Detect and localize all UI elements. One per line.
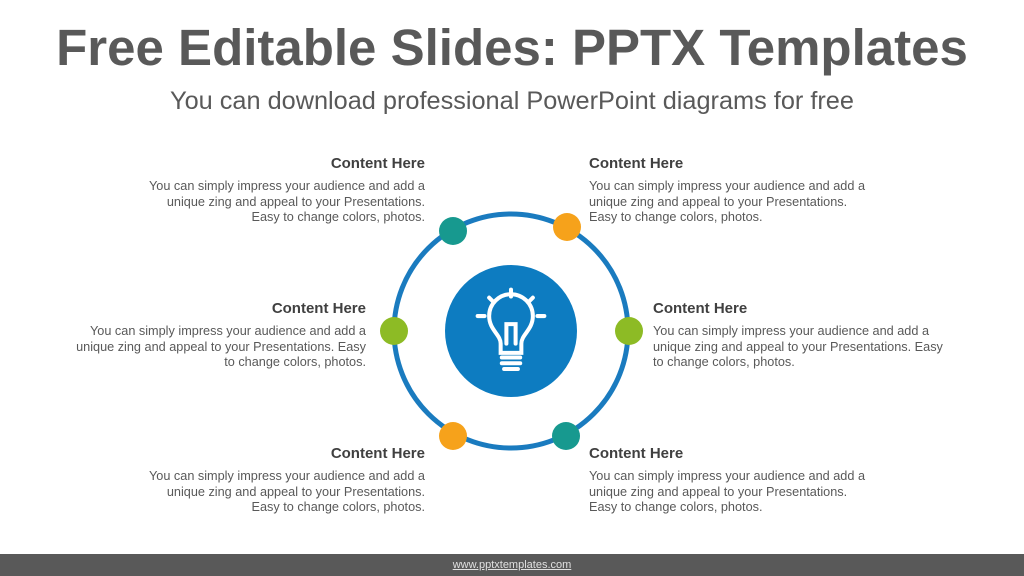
text: top right: Content Here [589,155,683,172]
text: middle left: You can simply impress your audience and add a unique zing and appeal to your Presentations. Easy to change colors, photos. [76,324,366,369]
text: middle right: Content Here [653,300,747,317]
text: bottom left: You can simply impress your audience and add a unique zing and appeal to your Presentations. Easy to change colors, photos. [149,469,425,514]
text: middle right [653,300,943,369]
text: top right: You can simply impress your audience and add a unique zing and appeal to your Presentations. Easy to change colors, photos. [589,179,865,224]
text: bottom left: Content Here [331,445,425,462]
text: bottom right: You can simply impress your audience and add a unique zing and appeal to your Presentations. Easy to change colors, photos. [589,469,865,514]
text: top left: Content Here [331,155,425,172]
dots [439,217,467,245]
text: middle right: You can simply impress your audience and add a unique zing and appeal to your Presentations. Easy to change colors, photos. [653,324,943,369]
text: bottom left [149,445,425,514]
text: middle left [76,300,366,369]
text: bottom right: Content Here [589,445,683,462]
footer [0,554,1024,576]
center circle [445,265,577,397]
text: middle left: Content Here [272,300,366,317]
icon: lightbulb [478,290,544,369]
title: Free Editable Slides: PPTX Templates [56,19,968,76]
footer: www.pptxtemplates.com [453,559,571,571]
subtitle: You can download professional PowerPoint diagrams for free [170,87,854,115]
text: top right [589,155,866,224]
text: top left: You can simply impress your audience and add a unique zing and appeal to your Presentations. Easy to change colors, photos. [149,179,425,224]
ring [394,214,628,448]
text: bottom right [589,445,866,514]
text: top left [149,155,425,224]
